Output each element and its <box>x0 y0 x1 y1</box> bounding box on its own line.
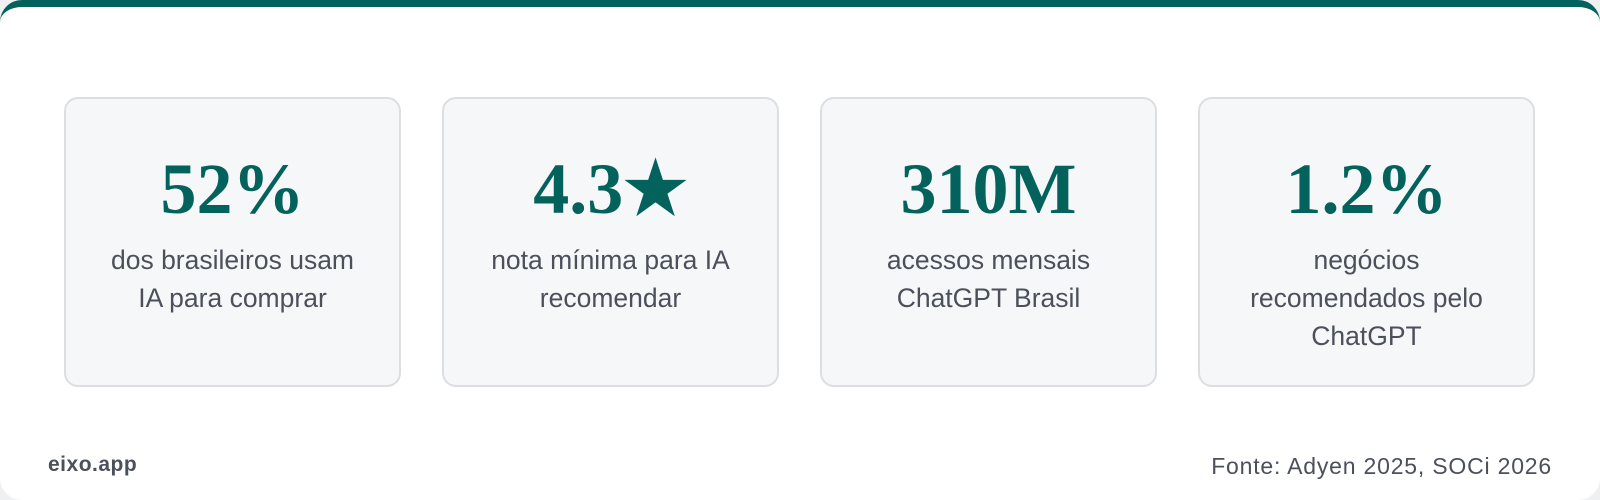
card: 52%: dos brasileiros usam IA para comprar <box>111 245 354 313</box>
card: 310M <box>820 97 1157 387</box>
footer brand: eixo.app <box>48 453 137 476</box>
card: 1.2%: negócios recomendados pelo ChatGPT <box>1250 245 1483 351</box>
card: 1.2%: 1.2% <box>1286 149 1448 229</box>
card: 310M: acessos mensais ChatGPT Brasil <box>887 245 1090 313</box>
card: 310M: 310M <box>901 149 1076 229</box>
card: 52% <box>64 97 401 387</box>
card: 4.3 star: nota mínima para IA recomendar <box>491 245 730 313</box>
footer source: Fonte: Adyen 2025, SOCi 2026 <box>1211 453 1552 479</box>
card: 52%: 52% <box>160 149 304 229</box>
card: 4.3 star <box>442 97 779 387</box>
card: 4.3 star: 4.3★ <box>533 149 688 229</box>
card: 1.2% <box>1198 97 1535 387</box>
